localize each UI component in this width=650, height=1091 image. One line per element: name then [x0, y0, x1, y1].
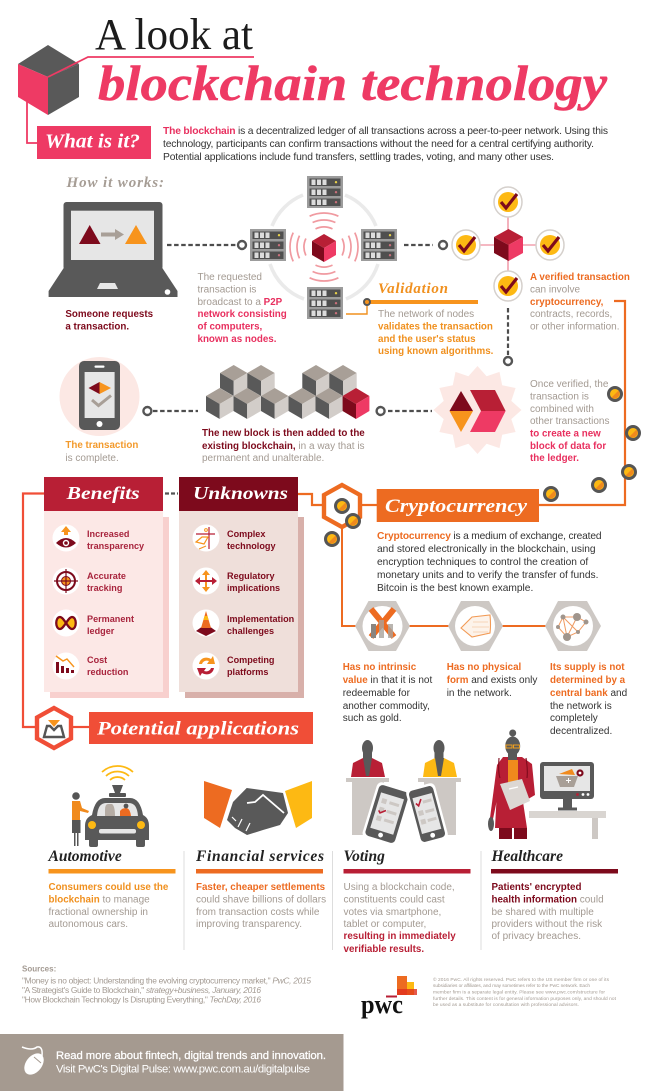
column: financial services: Financial services — [195, 848, 324, 865]
text: supply not determined: decentralized. — [550, 726, 612, 737]
item: cost reduction: reduction — [87, 667, 128, 677]
item: accurate tracking: tracking — [87, 583, 122, 593]
item: accurate tracking: Accurate — [87, 571, 126, 581]
text: copyright: subsidiaries or affiliates, and may sometimes refer to the PwC network. Each — [433, 983, 590, 989]
text: transaction is broadcast: The requested — [198, 272, 262, 283]
column: healthcare: providers without the risk — [492, 919, 603, 930]
panel: unknowns — [179, 477, 304, 698]
item: increased transparency: transparency — [87, 541, 145, 551]
text: supply not determined: the network is — [550, 701, 612, 712]
text: once verified — [530, 379, 610, 464]
heading: How it works: How it works: — [66, 175, 164, 191]
heading: Cryptocurrency — [377, 489, 539, 522]
item: regulatory implications: Regulatory — [227, 571, 275, 581]
item: implementation challenges — [192, 610, 294, 636]
connector: unknowns to cryptocurrency — [298, 494, 323, 505]
text: transaction complete — [65, 440, 138, 464]
text: verified transaction: can involve — [530, 284, 580, 296]
connector: network to verification — [404, 241, 447, 249]
column: healthcare — [490, 848, 618, 942]
text: once verified: block of data for — [530, 441, 606, 452]
text: new block added: permanent and unalterable. — [202, 453, 324, 464]
text: supply not determined: central bank and — [550, 688, 627, 699]
text: copyright — [433, 976, 617, 1008]
column: voting: Using a blockchain code, — [344, 882, 455, 893]
heading: Unknowns — [179, 477, 298, 511]
text: no intrinsic value: another commodity, — [343, 701, 430, 712]
column: voting: tablet or computer, — [344, 919, 426, 930]
text: read more: Read more about fintech, digital trends and innovation. — [56, 1050, 326, 1062]
text: verified transaction: contracts, records, — [530, 309, 612, 320]
column: healthcare: of privacy breaches. — [492, 931, 581, 942]
text: verified transaction — [530, 272, 630, 332]
connector: laptop to network — [167, 241, 246, 249]
icon: cryptocurrency hexagon — [324, 485, 546, 626]
text: no intrinsic value: Has no intrinsic — [343, 662, 417, 673]
item: implementation challenges: challenges — [227, 626, 274, 636]
text: no physical form: form and exists only — [447, 675, 537, 686]
connector: verification to new block — [504, 308, 512, 365]
item: complex technology — [192, 524, 276, 552]
column: financial services: Faster, cheaper settlements — [196, 882, 326, 893]
title: A look at: A look at — [95, 10, 253, 59]
item: competing platforms: platforms — [227, 667, 268, 677]
text block: cryptocurrency definition: monetary units and to verify the transfer of funds. — [377, 570, 598, 581]
item: complex technology: Complex — [227, 529, 265, 539]
text: validation description: and the user's status — [378, 334, 476, 345]
column: voting: Voting — [344, 848, 385, 865]
text block: blockchain definition: The blockchain is a decentralized ledger of all transactions across a peer-to-peer network. Using this — [163, 126, 608, 137]
heading: Cryptocurrency: Cryptocurrency — [385, 496, 528, 517]
text: copyright: further details. This content is for general information purposes only, and should not — [433, 996, 617, 1002]
text: read more — [56, 1050, 326, 1076]
item: permanent ledger — [52, 610, 134, 636]
column: automotive: blockchain to manage — [48, 894, 150, 906]
column: healthcare: be shared with multiple — [492, 907, 594, 918]
icon: laptop — [49, 202, 177, 297]
text: validation description: The network of nodes — [378, 309, 474, 320]
logo: pwc — [361, 976, 417, 1019]
diagram: blockchain cubes — [206, 365, 369, 419]
text block: blockchain definition: technology, participants can confirm transactions without the need for a central certifying authority. — [163, 139, 594, 150]
connector: orange line to cryptocurrency with dots — [539, 301, 640, 505]
item: complex technology: technology — [227, 541, 276, 551]
panel: benefits — [44, 477, 169, 698]
text: someone requests: Someone requests — [65, 309, 154, 320]
diagram: P2P network of nodes — [250, 176, 397, 319]
icon: no intrinsic value — [355, 601, 410, 651]
text: no intrinsic value — [343, 662, 432, 724]
item: regulatory implications: implications — [227, 583, 280, 593]
column: automotive — [48, 848, 176, 930]
text: no intrinsic value: value in that it is not — [343, 675, 432, 686]
icon: verified block with check marks — [452, 187, 564, 301]
text: once verified: combined with — [530, 404, 594, 415]
column: healthcare: health information could — [492, 894, 604, 906]
heading: What is it?: What is it? — [45, 132, 140, 152]
item: cost reduction: Cost — [87, 655, 107, 665]
column: financial services: improving transparency. — [196, 919, 302, 930]
heading: Benefits — [44, 477, 163, 511]
item: increased transparency — [52, 524, 145, 552]
text: transaction is broadcast: of computers, — [198, 322, 263, 332]
footer banner — [0, 1034, 344, 1091]
item: permanent ledger: Permanent — [87, 614, 134, 624]
item: regulatory implications — [192, 568, 280, 594]
text: new block added — [202, 428, 365, 464]
text: transaction is broadcast: known as nodes. — [198, 334, 277, 345]
text block: cryptocurrency definition: Bitcoin is the best known example. — [377, 583, 533, 594]
text: copyright: member firm is a separate legal entity. Please see www.pwc.com/structure for — [433, 990, 605, 996]
column: voting: verifiable results. — [344, 944, 424, 955]
text: supply not determined: completely — [550, 713, 598, 724]
column: voting: constituents could cast — [344, 894, 445, 906]
item: cost reduction — [52, 652, 128, 680]
text: transaction is broadcast: broadcast to a P2P — [198, 297, 283, 308]
heading: Benefits: Benefits — [65, 483, 140, 503]
text: supply not determined — [550, 662, 627, 737]
text: once verified: the ledger. — [530, 453, 579, 464]
logo: pwc: pwc — [361, 990, 403, 1019]
text: once verified: other transactions — [530, 416, 610, 427]
heading: Unknowns: Unknowns — [193, 483, 288, 503]
icon: starburst new block — [434, 366, 522, 454]
text: validation description — [378, 309, 494, 357]
text: verified transaction: or other information. — [530, 322, 620, 332]
title: blockchain technology: blockchain technology — [98, 55, 608, 111]
text: read more: Visit PwC's Digital Pulse: www.pwc.com.au/digitalpulse — [56, 1064, 310, 1076]
text: transaction is broadcast: network consisting — [198, 309, 287, 320]
text: supply not determined: Its supply is not — [550, 662, 625, 673]
text: once verified: transaction is — [530, 392, 589, 402]
text: sources — [22, 964, 311, 1004]
heading: What is it? — [37, 126, 151, 159]
icon: no physical form — [448, 601, 503, 651]
icon: phone transaction complete — [60, 357, 140, 436]
text: sources: "How Blockchain Technology Is Disrupting Everything," TechDay, 2016 — [22, 994, 261, 1004]
text: sources: "Money is no object: Understanding the evolving cryptocurrency market," PwC, 2015 — [22, 976, 311, 986]
text: supply not determined: determined by a — [550, 675, 626, 686]
text: no intrinsic value: redeemable for — [343, 688, 411, 699]
text block: cryptocurrency definition — [377, 531, 602, 594]
heading: Validation — [346, 281, 478, 314]
item: competing platforms: Competing — [227, 655, 274, 665]
text: sources: Sources: — [22, 964, 56, 974]
text: no physical form: Has no physical — [447, 662, 522, 673]
item: accurate tracking — [52, 568, 126, 594]
text: transaction is broadcast — [198, 272, 287, 345]
text block: cryptocurrency definition: encryption techniques to control the creation of — [377, 557, 588, 568]
text: copyright: be used as a substitute for consultation with professional advisors. — [433, 1002, 579, 1008]
heading: Potential applications — [89, 712, 313, 744]
illustration: doctor and records monitor — [488, 730, 606, 839]
column: financial services: could shave billions of dollars — [196, 894, 326, 906]
column: healthcare: Healthcare — [490, 848, 563, 865]
text: new block added: The new block is then added to the — [202, 428, 365, 439]
item: implementation challenges: Implementation — [227, 614, 294, 624]
column: automotive: Automotive — [48, 848, 122, 865]
column: automotive: fractional ownership in — [48, 907, 148, 918]
text: verified transaction: A verified transaction — [530, 272, 630, 283]
text block: blockchain definition — [163, 126, 608, 163]
text: someone requests: a transaction. — [65, 322, 129, 332]
item: increased transparency: Increased — [87, 529, 129, 539]
text: no intrinsic value: such as gold. — [343, 713, 402, 724]
illustration: voting candidates with phones — [346, 740, 461, 847]
text: new block added: existing blockchain, in a way that is — [202, 441, 365, 452]
text: transaction complete: is complete. — [65, 453, 119, 464]
column: healthcare: Patients' encrypted — [492, 882, 582, 893]
text: copyright: © 2016 PwC. All rights reserved. PwC refers to the US member firm or one of its — [433, 976, 610, 983]
text block: cryptocurrency definition: Cryptocurrency is a medium of exchange, created — [377, 531, 602, 542]
connector: benefits to potential applications line — [23, 494, 178, 727]
column: voting: resulting in immediately — [344, 931, 456, 942]
icon: potential applications hexagon — [37, 708, 89, 748]
column: automotive: autonomous cars. — [48, 919, 128, 930]
text: validation description: using known algorithms. — [378, 346, 494, 357]
text: once verified: Once verified, the — [530, 379, 609, 390]
icon: decentralized network — [545, 601, 601, 651]
icon: title cube with connectors — [18, 45, 254, 143]
text: transaction complete: The transaction — [65, 440, 138, 451]
text: no physical form: in the network. — [447, 688, 512, 699]
text: no physical form — [447, 662, 537, 699]
item: competing platforms — [192, 652, 274, 680]
text: someone requests — [65, 309, 154, 332]
connector: new block to chain — [377, 407, 432, 415]
column: financial services — [195, 848, 326, 930]
column: financial services: from transaction costs while — [196, 907, 320, 918]
illustration: handshake — [204, 781, 312, 835]
connector: chain to phone — [143, 407, 198, 415]
column: voting: votes via smartphone, — [344, 907, 441, 918]
text block: cryptocurrency definition: and stored electronically in the blockchain, using — [377, 544, 596, 555]
icon: computer mouse — [20, 1047, 48, 1078]
column: automotive: Consumers could use the — [48, 882, 169, 893]
text: validation description: validates the transaction — [378, 322, 493, 332]
text: once verified: to create a new — [530, 428, 601, 440]
column: voting — [344, 848, 470, 955]
heading: Potential applications: Potential applications — [96, 718, 299, 740]
illustration: autonomous car — [72, 766, 149, 847]
heading: Validation: Validation — [378, 281, 448, 297]
text block: blockchain definition: Potential applications include fund transfers, settling trades, voting, and many other uses. — [163, 152, 554, 163]
item: permanent ledger: ledger — [87, 626, 115, 636]
text: verified transaction: cryptocurrency, — [530, 297, 604, 308]
text: sources: "A Strategist's Guide to Blockchain," strategy+business, January, 2016 — [22, 985, 261, 995]
text: transaction is broadcast: transaction is — [198, 284, 256, 296]
